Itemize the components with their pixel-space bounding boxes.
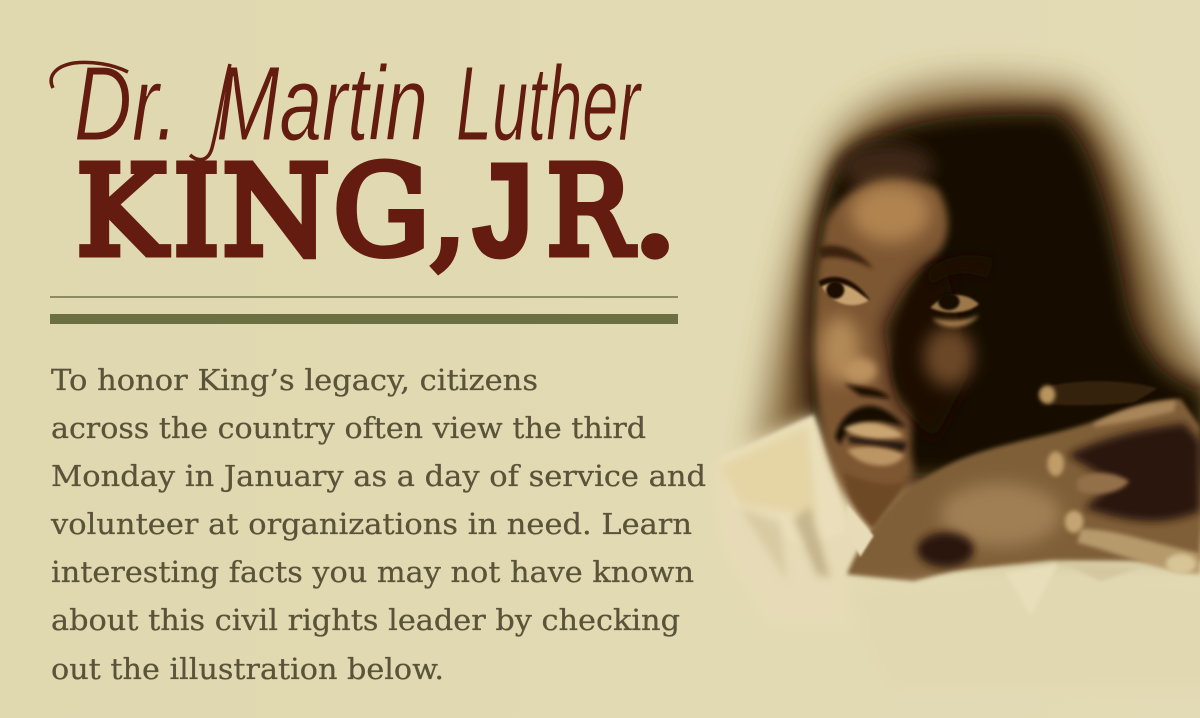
title swash: descending M stroke	[190, 64, 230, 160]
body paragraph: volunteer at organizations in need. Learn	[50, 507, 692, 541]
title swash: D flourish	[51, 62, 128, 88]
body paragraph: out the illustration below.	[51, 652, 444, 686]
title word: Dr.: Dr.	[74, 45, 178, 163]
portrait: elbow shadow	[917, 532, 974, 567]
title word: Martin: Martin	[216, 45, 428, 163]
title: KING, JR.: ,	[430, 140, 466, 284]
portrait: shirt fold shadows	[794, 508, 830, 578]
title: KING, JR.: K	[76, 140, 168, 284]
portrait: nose	[844, 357, 890, 399]
portrait: upper head mid-tone	[840, 143, 934, 192]
portrait: forearm	[847, 399, 1200, 581]
portrait: finger highlights	[1039, 386, 1200, 574]
title: KING, JR.: R	[546, 140, 635, 284]
title: KING, JR.: J	[467, 139, 539, 300]
title: KING, JR.: G	[333, 140, 430, 284]
body paragraph: Monday in January as a day of service and	[51, 459, 706, 493]
portrait: shirt highlight	[720, 427, 817, 518]
portrait: jacket lapel tint	[1064, 564, 1141, 581]
portrait: left eye	[819, 277, 870, 305]
portrait: inner halo	[790, 102, 1200, 476]
title: KING, JR.: I	[173, 140, 220, 284]
thick divider	[50, 314, 678, 324]
title word: Luther: Luther	[456, 45, 642, 163]
portrait: tie triangle	[1006, 564, 1058, 616]
body paragraph	[50, 363, 706, 686]
portrait: right eyebrow	[927, 255, 994, 287]
portrait: lower fade into background	[844, 576, 1200, 687]
portrait photograph	[710, 82, 1200, 687]
portrait: shirt	[710, 415, 907, 627]
body paragraph: about this civil rights leader by checking	[51, 603, 680, 637]
portrait: shirt upper edge	[720, 415, 847, 546]
portrait: right eye	[930, 293, 979, 327]
portrait: forehead highlight	[850, 183, 930, 243]
thin divider	[50, 296, 678, 298]
portrait: lit side of face	[814, 180, 948, 532]
title: KING, JR.	[76, 116, 680, 300]
portrait: lips	[844, 423, 907, 466]
body paragraph: across the country often view the third	[51, 411, 646, 445]
body paragraph: To honor King’s legacy, citizens	[51, 363, 538, 397]
title: KING, JR.: N	[222, 140, 330, 284]
portrait: upper finger	[1038, 381, 1158, 405]
portrait: chin	[844, 473, 907, 529]
portrait: soft halo	[757, 82, 1200, 546]
title: KING, JR.: .	[630, 116, 680, 290]
portrait: shadow across nose	[884, 258, 971, 441]
title: Dr. Martin Luther	[74, 45, 642, 163]
portrait: collar light	[847, 504, 874, 557]
portrait: left eyebrow	[819, 245, 874, 269]
portrait: left cheek highlight	[820, 316, 860, 383]
portrait: right cheek	[924, 327, 974, 387]
portrait: forearm light	[940, 483, 1061, 546]
body paragraph: interesting facts you may not have known	[51, 555, 694, 589]
portrait: hand shadow	[1067, 423, 1200, 521]
portrait: dark head silhouette	[811, 114, 1200, 476]
portrait: moustache	[835, 406, 907, 445]
